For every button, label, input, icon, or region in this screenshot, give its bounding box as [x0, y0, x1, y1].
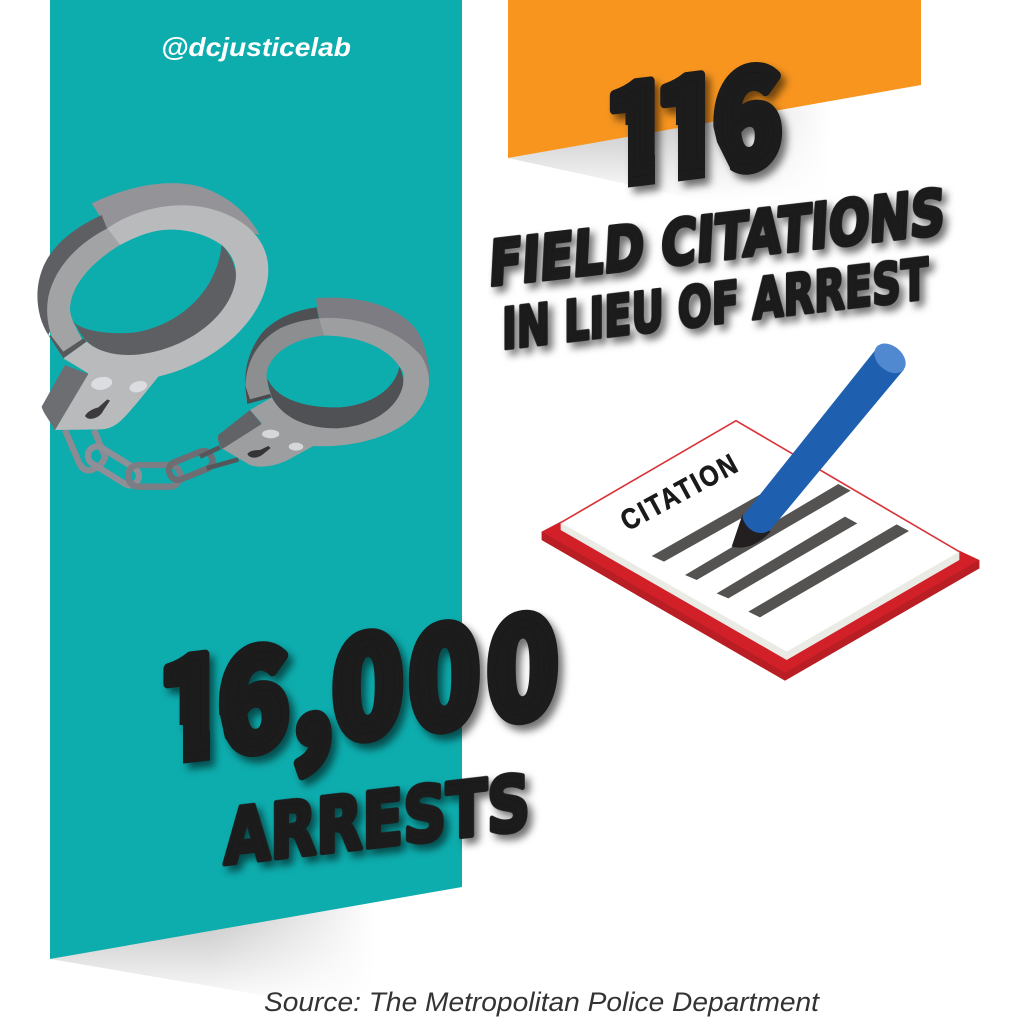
number: 16,000: 16,000	[156, 556, 559, 801]
icon: handcuffs	[37, 183, 430, 489]
shadow under teal panel	[50, 890, 377, 1008]
pencil	[732, 515, 771, 548]
paper sheet	[561, 421, 959, 652]
shadow under orange panel	[508, 90, 832, 202]
heading: arrests: ARRESTS	[224, 758, 530, 882]
handle text: @dcjusticelab	[161, 32, 351, 62]
small cuff	[218, 298, 430, 467]
paper edge	[561, 523, 959, 660]
citation label: CITATION	[615, 447, 745, 537]
number: 116: 116	[603, 10, 782, 224]
icon: citation pad and pencil	[542, 338, 979, 681]
red pad	[542, 522, 979, 681]
panel: orange citations background	[508, 0, 921, 158]
chain	[65, 430, 238, 489]
panel: teal arrests background	[50, 0, 462, 959]
large cuff	[37, 183, 268, 430]
text lines	[652, 484, 909, 617]
source note: Source: The Metropolitan Police Department	[264, 987, 821, 1017]
